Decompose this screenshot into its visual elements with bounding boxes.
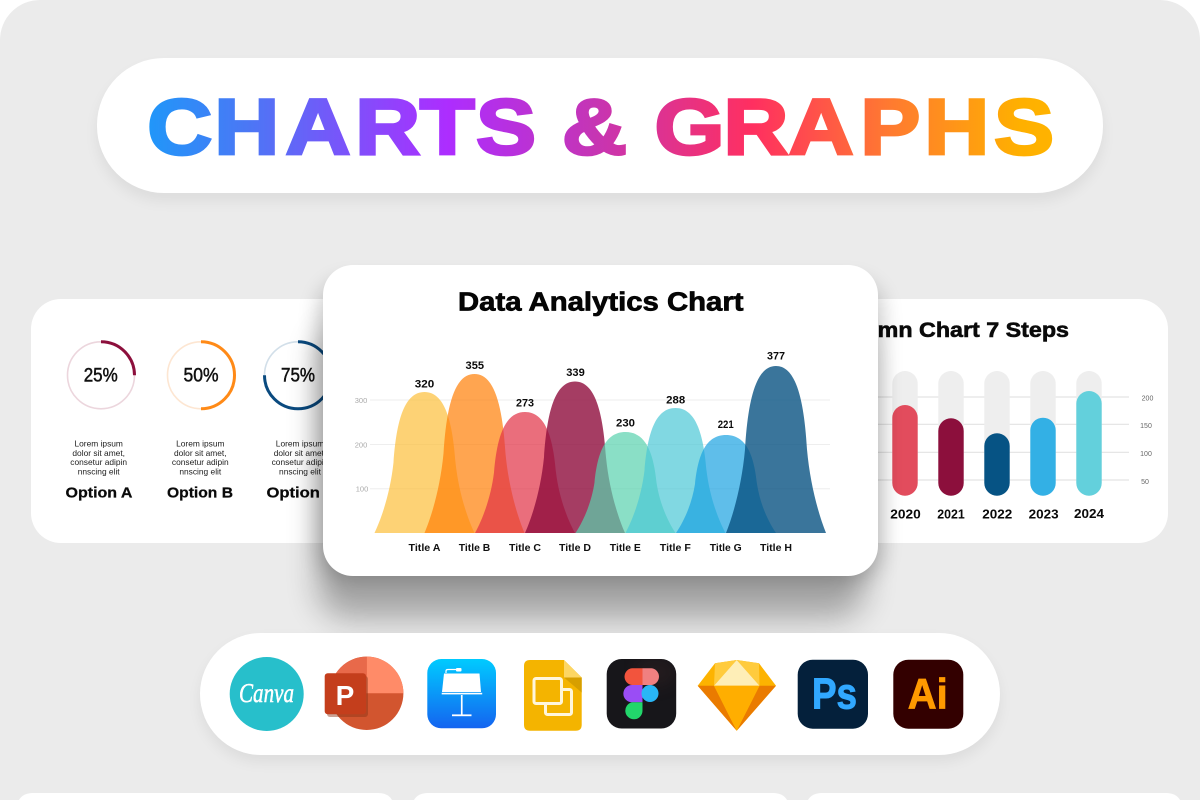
text: option A: consetur adipin (70, 457, 127, 467)
category labels: Title C (509, 542, 541, 554)
icon: powerpoint: P (336, 680, 354, 711)
text: option B: consetur adipin (172, 457, 229, 467)
value labels: 320 (415, 378, 434, 390)
text: option B (167, 438, 233, 501)
text: option C: nnscing elit (279, 466, 322, 476)
text: option C: consetur adipin (272, 457, 329, 467)
panel: app icons (200, 633, 1000, 762)
column tracks (892, 371, 1102, 496)
year labels: 2021 (937, 506, 965, 522)
category labels: Title A (408, 542, 441, 554)
icon: figma (607, 656, 677, 728)
year labels (890, 506, 1105, 522)
chart title: Data Analytics Chart (458, 289, 744, 317)
ring 50% (168, 342, 234, 409)
icon: illustrator: Ai (908, 670, 948, 718)
value labels (415, 350, 785, 431)
text: option C: Lorem ipsum (276, 438, 324, 448)
text: option C (266, 438, 337, 501)
axis labels: 200 (1142, 396, 1153, 402)
year labels: 2020 (890, 506, 921, 522)
ring 75%: 75% (281, 366, 315, 387)
text: option C: Option C (266, 484, 337, 501)
center card shadow (318, 280, 883, 618)
year labels: 2022 (982, 506, 1012, 522)
category labels: Title E (610, 542, 641, 554)
y axis labels: 200 (355, 440, 367, 449)
column bars (892, 391, 1102, 496)
axis labels: 100 (1140, 451, 1152, 458)
category labels: Title D (559, 542, 591, 554)
category labels: Title B (459, 542, 491, 554)
ring 25% (68, 342, 134, 409)
icon: keynote (427, 659, 496, 728)
text: option A: dolor sit amet, (72, 448, 125, 458)
value labels: 230 (616, 417, 635, 429)
bell chart (374, 366, 826, 533)
icon: canva: Canva (239, 678, 294, 708)
axis labels: 50 (1141, 479, 1149, 486)
value labels: 288 (666, 394, 685, 406)
value labels: 273 (516, 397, 534, 409)
text: option B: Option B (167, 484, 233, 501)
column chart title: Column Chart 7 Steps (826, 319, 1069, 342)
text: option A: Lorem ipsum (74, 438, 123, 448)
title pill (97, 58, 1103, 201)
text: option C: dolor sit amet, (274, 448, 326, 458)
ring 75% (264, 342, 332, 409)
text: option B: dolor sit amet, (174, 448, 227, 458)
icon: powerpoint (325, 657, 403, 730)
value labels: 339 (566, 367, 585, 379)
icon: canva (230, 657, 304, 731)
text: option A: nnscing elit (78, 466, 120, 476)
category labels: Title H (760, 542, 792, 554)
text: option A: Option A (66, 484, 133, 501)
value labels: 355 (466, 360, 484, 372)
text: option A (66, 438, 133, 501)
axis labels: 150 (1140, 423, 1152, 430)
year labels: 2023 (1029, 506, 1059, 522)
axis labels (1140, 396, 1153, 486)
ring 25%: 25% (84, 366, 118, 387)
y axis labels: 300 (355, 396, 367, 405)
category labels: Title F (660, 542, 691, 554)
icon: illustrator (893, 660, 963, 729)
panel: data analytics chart (323, 265, 878, 576)
value labels: 377 (767, 350, 785, 362)
category labels (408, 542, 792, 554)
value labels: 221 (718, 419, 734, 431)
y axis labels: 100 (356, 484, 368, 494)
category labels: Title G (710, 542, 742, 554)
y axis labels (355, 396, 368, 494)
panel: progress rings (31, 299, 351, 543)
panel: column chart (826, 299, 1168, 543)
year labels: 2024 (1074, 506, 1105, 521)
bottom panels (19, 793, 1180, 800)
icon: photoshop: Ps (812, 669, 857, 718)
text: option B: nnscing elit (179, 466, 222, 476)
title: CHARTS & GRAPHS (147, 82, 1054, 171)
text: option B: Lorem ipsum (176, 438, 225, 448)
icon: google slides (524, 660, 582, 731)
icon: photoshop (798, 660, 868, 729)
ring 50%: 50% (184, 366, 219, 387)
icon: sketch (698, 660, 776, 731)
